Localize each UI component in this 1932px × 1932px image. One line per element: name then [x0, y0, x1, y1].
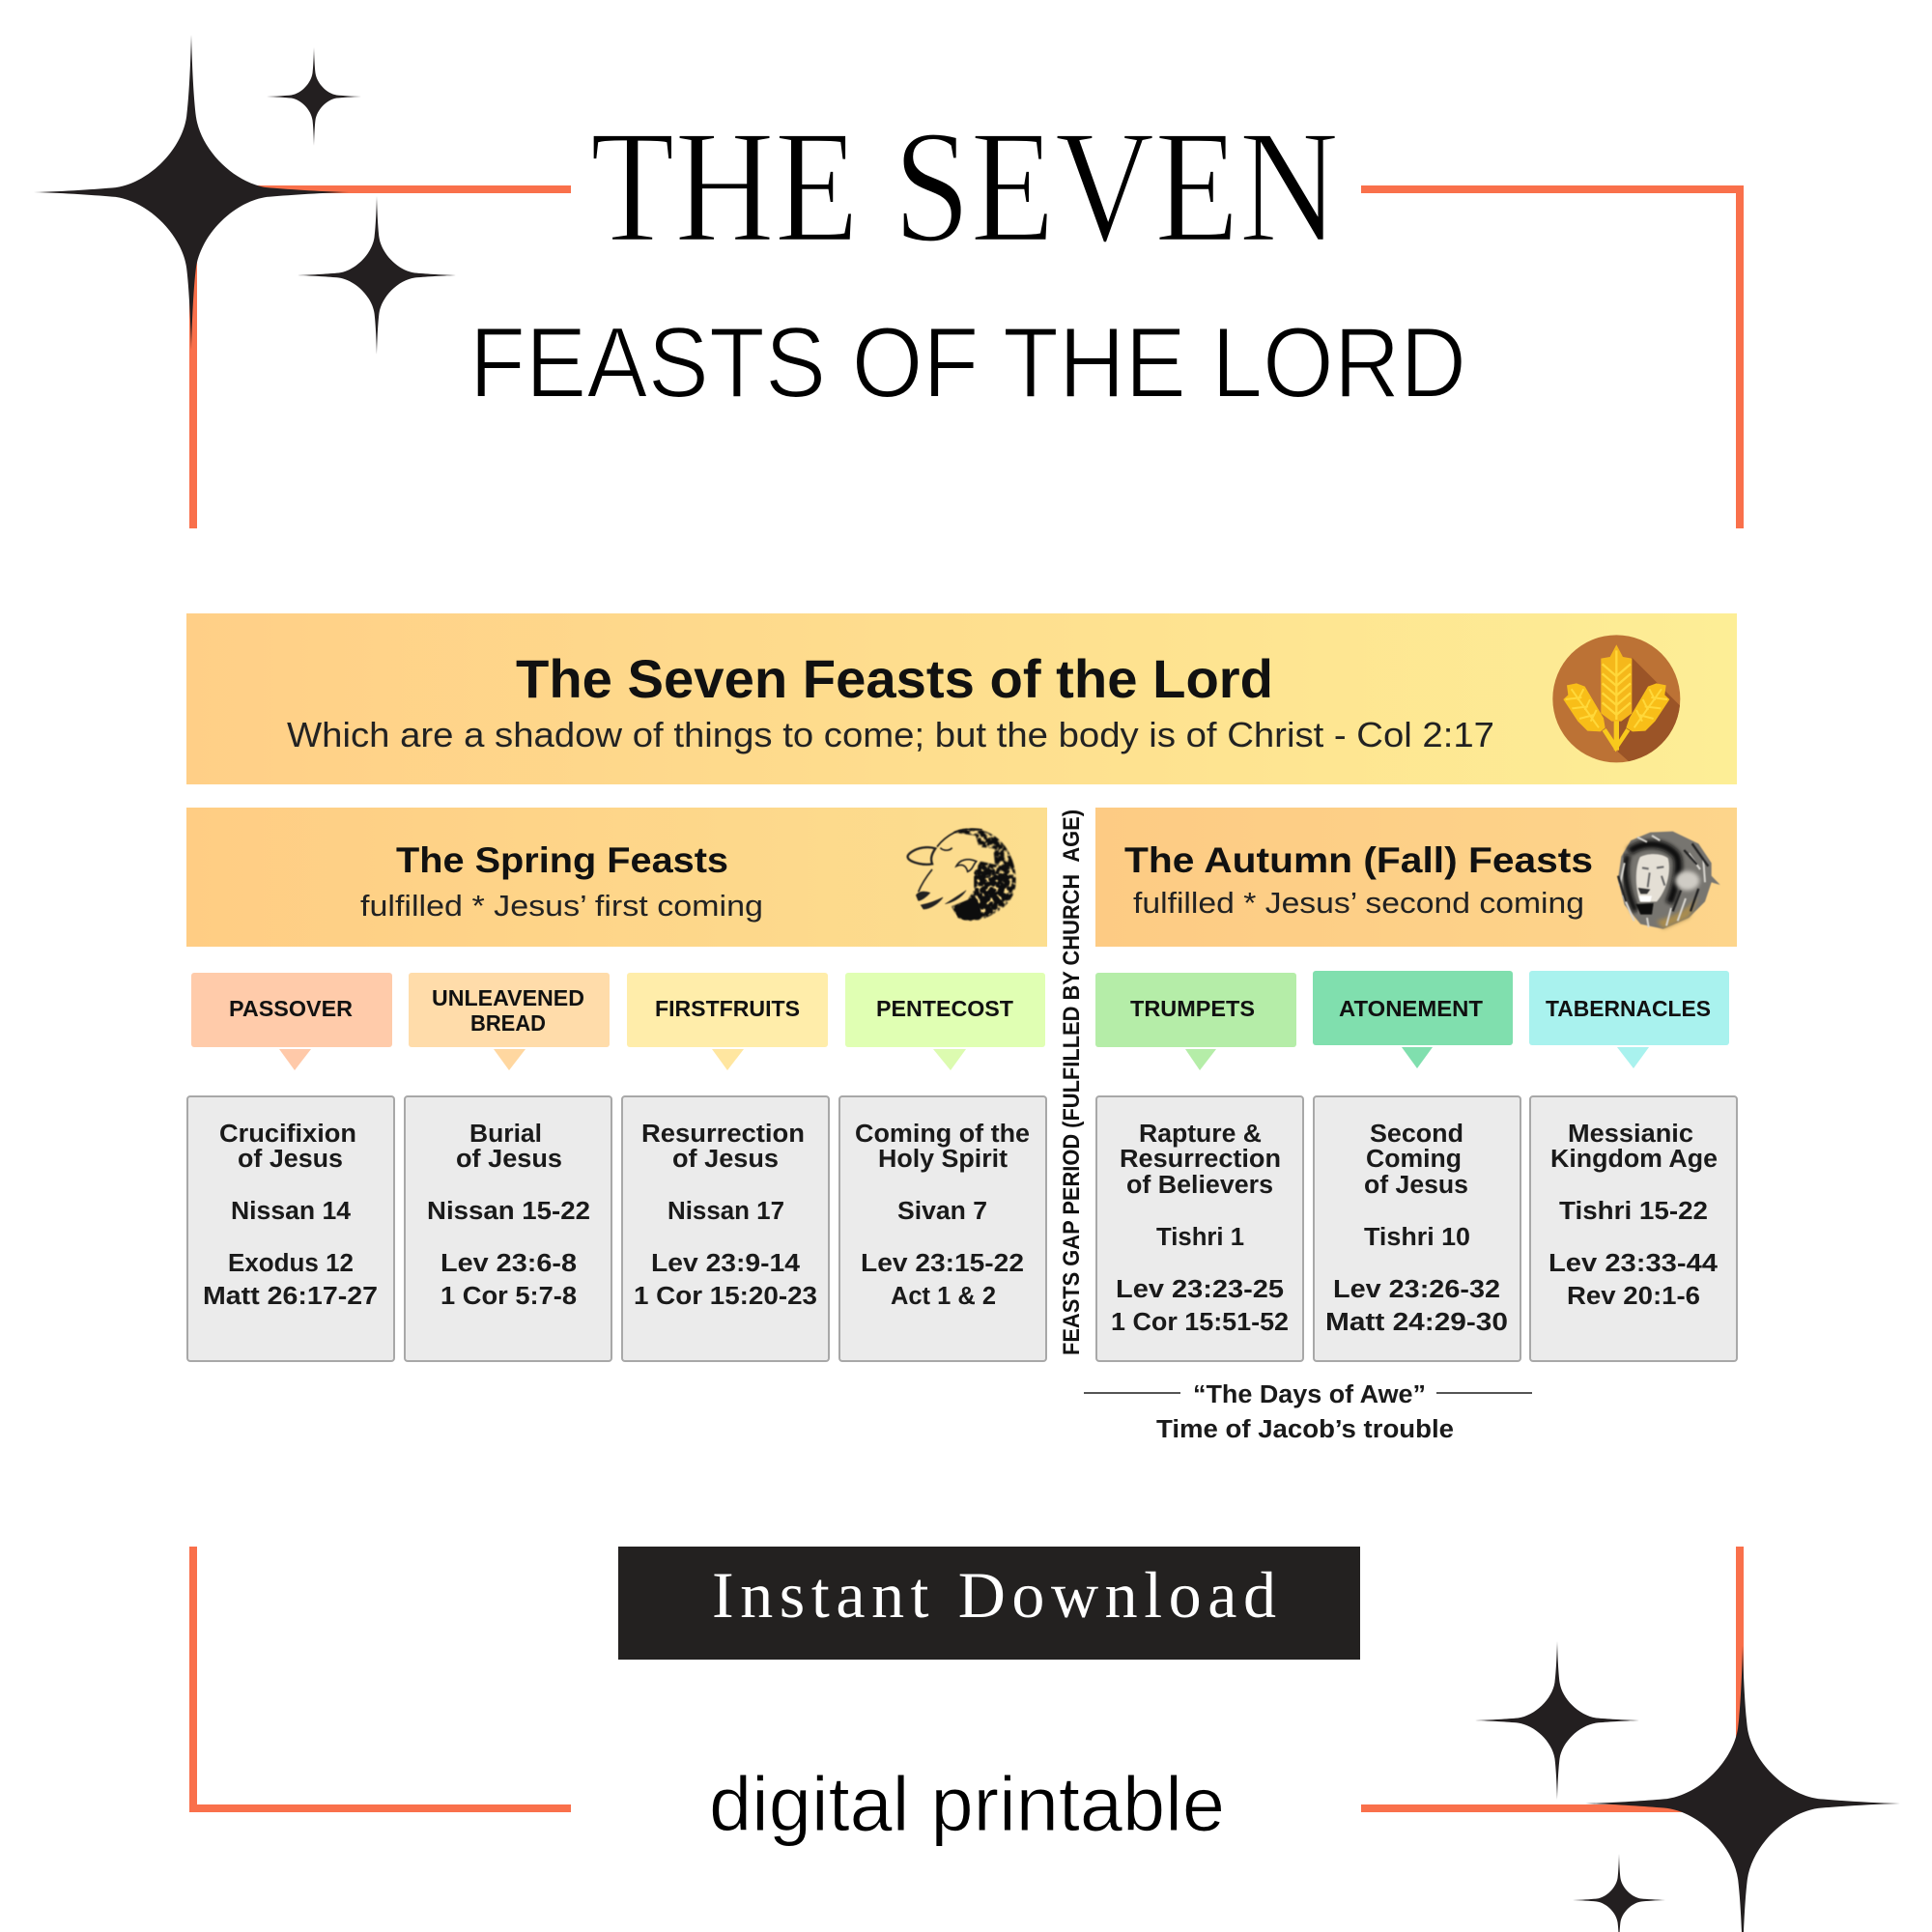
subheading: scripture: Which are a shadow of things to come; but the body is of Christ - Col 2:17 — [287, 715, 1494, 754]
card: trumpets: Rapture & — [1139, 1121, 1262, 1148]
icon: small sparkle bottom — [1573, 1854, 1665, 1932]
card: tabernacles: Kingdom Age — [1550, 1146, 1718, 1173]
icon: medium sparkle bottom — [1475, 1641, 1639, 1800]
vertical label: feasts gap period: FEASTS GAP PERIOD (FULFILLED BY CHURCH AGE) — [1059, 810, 1085, 1355]
subheading: first coming: fulfilled * Jesus’ first coming — [360, 889, 763, 923]
panel: spring feasts banner — [186, 808, 1047, 947]
icon: medium sparkle top — [298, 196, 456, 355]
tag: unleavened bread — [409, 973, 610, 1070]
tag: trumpets: TRUMPETS — [1130, 996, 1255, 1021]
tag: passover: PASSOVER — [229, 996, 353, 1021]
card: pentecost: Holy Spirit — [878, 1146, 1009, 1173]
icon: lion head — [1618, 832, 1720, 929]
text: digital printable: digital printable — [709, 1761, 1225, 1847]
callout: days of awe — [1084, 1381, 1532, 1443]
card: atonement: Matt 24:29-30 — [1325, 1309, 1508, 1336]
card: passover: Matt 26:17-27 — [203, 1283, 378, 1310]
card: passover: Nissan 14 — [231, 1198, 352, 1225]
card: pentecost: Sivan 7 — [897, 1198, 987, 1225]
callout: days of awe: Time of Jacob’s trouble — [1156, 1416, 1454, 1443]
heading: The Seven Feasts of the Lord: The Seven Feasts of the Lord — [516, 648, 1273, 709]
card: passover — [187, 1096, 394, 1361]
tag: firstfruits — [627, 973, 828, 1070]
card: atonement: Second — [1370, 1121, 1463, 1148]
card: tabernacles: Lev 23:33-44 — [1548, 1250, 1719, 1277]
tag: atonement: ATONEMENT — [1339, 996, 1483, 1021]
card: tabernacles: Rev 20:1-6 — [1567, 1283, 1700, 1310]
card: trumpets — [1096, 1096, 1303, 1361]
tag: passover — [191, 973, 392, 1070]
icon: sheep head — [908, 829, 1016, 921]
card: passover: Crucifixion — [219, 1121, 356, 1148]
card: trumpets: Tishri 1 — [1156, 1224, 1244, 1251]
tag: atonement — [1313, 971, 1513, 1068]
tag: tabernacles: TABERNACLES — [1546, 996, 1711, 1021]
icon: wheat — [1552, 635, 1681, 763]
title: THE SEVEN: THE SEVEN — [590, 98, 1339, 276]
card: trumpets: 1 Cor 15:51-52 — [1111, 1309, 1289, 1336]
card: pentecost: Lev 23:15-22 — [861, 1250, 1024, 1277]
frame line: top left — [193, 189, 571, 528]
card: atonement: Coming — [1366, 1146, 1462, 1173]
subheading: second coming: fulfilled * Jesus’ second coming — [1133, 886, 1584, 920]
card: trumpets: of Believers — [1126, 1172, 1273, 1199]
button: instant download: Instant Download — [712, 1558, 1276, 1632]
card: unleavened bread: Nissan 15-22 — [427, 1198, 590, 1225]
frame line: bottom left — [193, 1547, 571, 1808]
card: firstfruits — [622, 1096, 829, 1361]
card: pentecost: Act 1 & 2 — [891, 1283, 996, 1310]
tag: trumpets — [1095, 973, 1296, 1070]
card: firstfruits: Resurrection — [641, 1121, 805, 1148]
panel: autumn feasts banner — [1095, 808, 1737, 947]
card: firstfruits: of Jesus — [672, 1146, 779, 1173]
tag: unleavened bread: UNLEAVENED — [432, 985, 584, 1010]
card: atonement — [1314, 1096, 1520, 1361]
heading: The Autumn (Fall) Feasts: The Autumn (Fall) Feasts — [1124, 840, 1593, 880]
tag: firstfruits: FIRSTFRUITS — [655, 996, 800, 1021]
frame line: bottom right — [1361, 1547, 1740, 1808]
card: unleavened bread: Burial — [469, 1121, 542, 1148]
card: tabernacles: Tishri 15-22 — [1559, 1198, 1708, 1225]
icon: small sparkle top — [267, 47, 361, 146]
icon: large sparkle bottom right — [1585, 1646, 1900, 1932]
card: firstfruits: 1 Cor 15:20-23 — [634, 1283, 817, 1310]
card: pentecost: Coming of the — [855, 1121, 1030, 1148]
card: atonement: of Jesus — [1364, 1172, 1468, 1199]
frame line: top right — [1361, 189, 1740, 528]
tag: pentecost: PENTECOST — [876, 996, 1013, 1021]
card: atonement: Tishri 10 — [1364, 1224, 1470, 1251]
card: passover: Exodus 12 — [228, 1250, 354, 1277]
card: firstfruits: Nissan 17 — [668, 1198, 784, 1225]
card: tabernacles: Messianic — [1568, 1121, 1693, 1148]
card: firstfruits: Lev 23:9-14 — [651, 1250, 801, 1277]
panel: header banner — [186, 613, 1737, 784]
card: pentecost — [839, 1096, 1046, 1361]
card: atonement: Lev 23:26-32 — [1333, 1276, 1500, 1303]
heading: The Spring Feasts: The Spring Feasts — [396, 840, 728, 880]
card: trumpets: Lev 23:23-25 — [1116, 1276, 1284, 1303]
tag: unleavened bread: BREAD — [470, 1010, 546, 1036]
card: unleavened bread: 1 Cor 5:7-8 — [440, 1283, 577, 1310]
card: unleavened bread — [405, 1096, 611, 1361]
callout: days of awe: “The Days of Awe” — [1193, 1381, 1426, 1408]
icon: large sparkle top left — [34, 35, 349, 350]
card: passover: of Jesus — [238, 1146, 343, 1173]
card: unleavened bread: Lev 23:6-8 — [440, 1250, 577, 1277]
card: tabernacles — [1530, 1096, 1737, 1361]
tag: tabernacles — [1529, 971, 1729, 1068]
card: unleavened bread: of Jesus — [456, 1146, 562, 1173]
card: trumpets: Resurrection — [1120, 1146, 1281, 1173]
tag: pentecost — [845, 973, 1045, 1070]
button: instant download — [618, 1547, 1360, 1660]
title: FEASTS OF THE LORD: FEASTS OF THE LORD — [469, 307, 1466, 419]
